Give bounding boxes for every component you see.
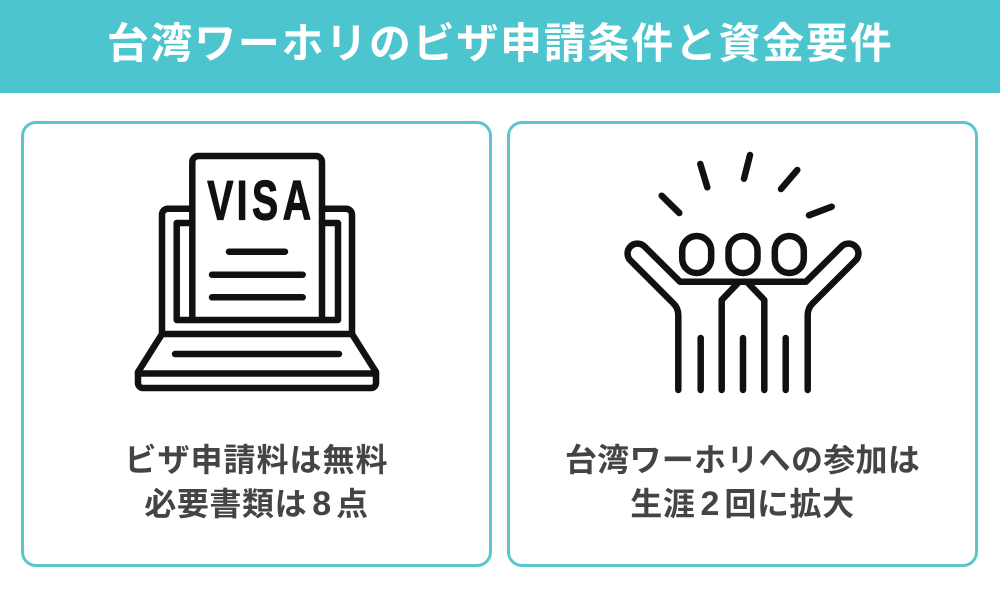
panel: participation [507, 121, 978, 567]
title [0, 0, 1000, 93]
icon: laptop with visa document: VISA [207, 170, 311, 232]
caption: visa fee and documents: ビザ申請料は無料 [124, 442, 388, 478]
caption: visa fee and documents: 必要書類は8点 [144, 485, 369, 523]
caption: visa fee and documents [124, 442, 388, 523]
panel: visa conditions [21, 121, 492, 567]
caption: two-time participation: 台湾ワーホリへの参加は [565, 442, 920, 478]
caption: two-time participation [565, 442, 920, 523]
caption: two-time participation: 生涯2回に拡大 [630, 485, 855, 523]
title: 台湾ワーホリのビザ申請条件と資金要件 [107, 20, 893, 67]
